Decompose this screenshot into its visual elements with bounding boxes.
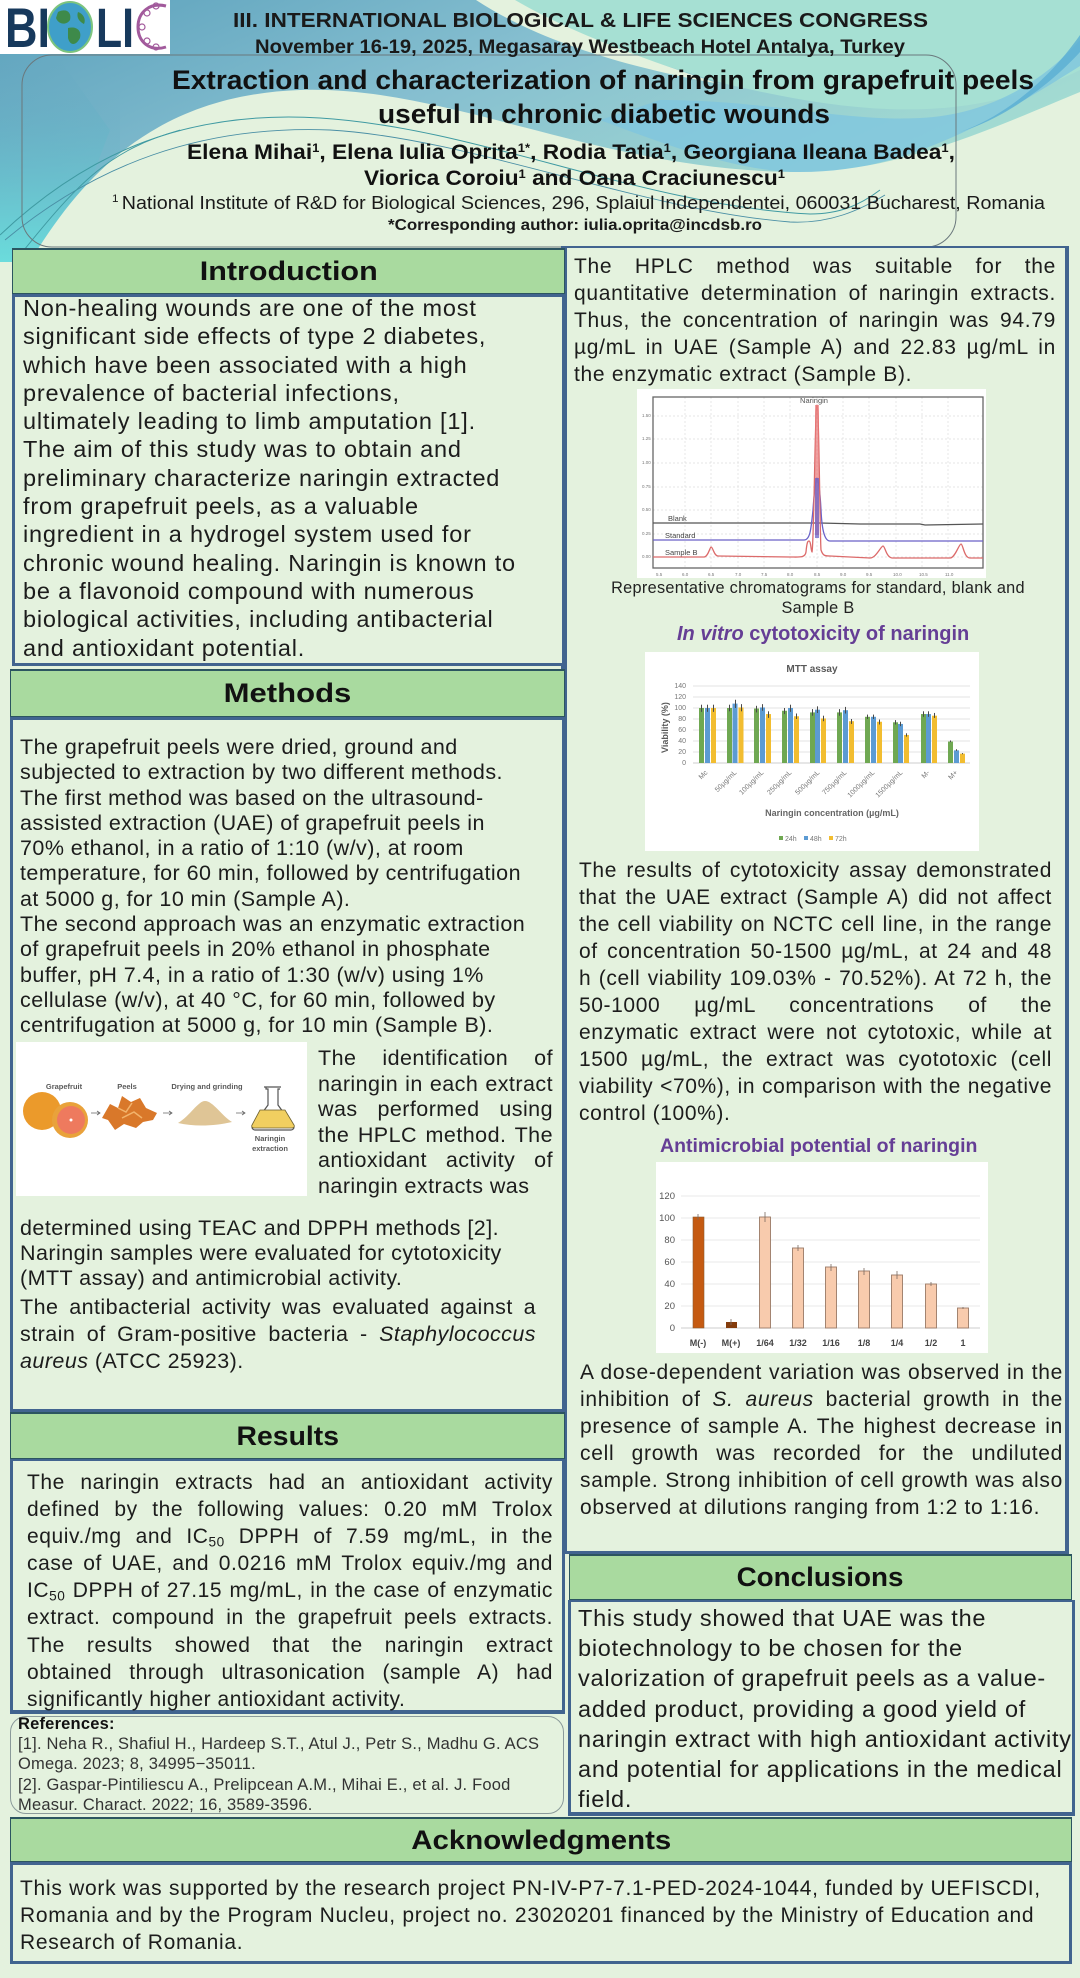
chart: antimicrobial bars: 1/8 xyxy=(858,1338,870,1348)
heading: introduction xyxy=(12,248,565,294)
chart: MTT assay bars: 20 xyxy=(678,749,686,756)
text: HPLC results xyxy=(574,254,1056,386)
chart: MTT assay bars: 100 xyxy=(674,705,686,712)
authors: 1 xyxy=(519,167,526,181)
chart: MTT assay bars xyxy=(645,652,979,851)
heading: results: Results xyxy=(236,1420,339,1450)
chart: antimicrobial bars: 1/4 xyxy=(891,1338,903,1348)
affiliation: 1 xyxy=(112,193,122,205)
chart: HPLC chromatograms: 9.5 xyxy=(866,572,873,577)
heading: antimicrobial potential: Antimicrobial potential of naringin xyxy=(660,1135,977,1157)
chart: HPLC chromatograms: 1.00 xyxy=(642,460,651,465)
text: conclusions: valorization of grapefruit peels as a value- xyxy=(578,1665,1046,1691)
illustration: grapefruit extraction workflow: Drying and grinding xyxy=(171,1082,243,1091)
text: cytotoxicity results: the cell viability on NCTC cell line, in the range xyxy=(579,912,1052,936)
panel: results xyxy=(10,1412,565,1714)
text: HPLC results: µg/mL in UAE (Sample A) and 22.83 µg/mL in xyxy=(574,336,1056,358)
text: methods continuation: Naringin samples were evaluated for cytotoxicity xyxy=(20,1240,502,1264)
text: cytotoxicity results: 50-1000 µg/mL concentrations of the xyxy=(579,994,1052,1016)
text: results: case of UAE, and 0.0216 mM Trolox equiv./mg and xyxy=(27,1552,553,1575)
text: conclusions: and potential for applications in the medical xyxy=(578,1756,1062,1782)
panel: right column results xyxy=(561,246,1069,1554)
chart: antimicrobial bars: 60 xyxy=(664,1257,675,1268)
chart: HPLC chromatograms: Sample B xyxy=(665,548,698,557)
chart: MTT assay bars: Viability (%) xyxy=(660,702,670,753)
text: references: Omega. 2023; 8, 34995−35011. xyxy=(18,1755,256,1773)
authors: 1 xyxy=(312,141,320,155)
chart: HPLC chromatograms: 0.75 xyxy=(642,484,651,489)
chart: HPLC chromatograms: 8.0 xyxy=(787,572,794,577)
panel: references xyxy=(10,1716,564,1814)
text: methods extraction steps: The second approach was an enzymatic extraction xyxy=(20,912,525,936)
chart: HPLC chromatograms: 8.5 xyxy=(814,572,821,577)
authors: Elena Mihai xyxy=(187,141,303,164)
chart: HPLC chromatograms: 10.5 xyxy=(919,572,928,577)
text: identification beside illustration: the HPLC method. The xyxy=(318,1122,553,1146)
text: results: The results showed that the naringin extract xyxy=(27,1634,553,1657)
authors: , Rodia Tatia xyxy=(530,141,664,164)
text: antibacterial activity: The antibacterial activity was evaluated against a xyxy=(20,1295,536,1319)
authors: 1 xyxy=(778,167,785,181)
text: antimicrobial results: A dose-dependent variation was observed in the xyxy=(580,1360,1063,1384)
authors: 1 xyxy=(941,141,949,155)
text: identification beside illustration: antioxidant activity of xyxy=(318,1148,553,1172)
text: introduction: chronic wound healing. Naringin is known to xyxy=(23,550,516,576)
text: conclusions: biotechnology to be chosen for the xyxy=(578,1635,963,1661)
text: cytotoxicity results: h (cell viability 109.03% - 70.52%). At 72 h, the xyxy=(579,966,1052,990)
panel: conclusions xyxy=(568,1554,1075,1816)
text: introduction: significant side effects of type 2 diabetes, xyxy=(23,323,486,349)
chart: MTT assay bars: 140 xyxy=(674,683,686,690)
chart: HPLC chromatograms: Naringin xyxy=(800,396,828,405)
text: introduction: prevalence of bacterial infections, xyxy=(23,380,400,406)
text: introduction: and antioxidant potential. xyxy=(23,635,305,661)
text: acknowledgments: Research of Romania. xyxy=(20,1931,243,1954)
text: methods extraction steps: assisted extraction (UAE) of grapefruit peels in xyxy=(20,811,485,835)
chart: MTT assay bars: 24h xyxy=(785,836,797,843)
text: cytotoxicity results: viability <70%), in comparison with the negative xyxy=(579,1074,1052,1098)
heading: introduction: Introduction xyxy=(200,256,377,286)
text: introduction: The aim of this study was to obtain and xyxy=(23,436,462,462)
chart: MTT assay bars: Naringin concentration (µg/mL) xyxy=(765,808,899,818)
chart: HPLC chromatograms xyxy=(637,389,986,578)
conference date and venue: November 16-19, 2025, Megasaray Westbeach Hotel Antalya, Turkey xyxy=(255,37,905,58)
chart: HPLC chromatograms: 11.0 xyxy=(945,572,954,577)
text: methods extraction steps: centrifugation at 5000 g, for 10 min (Sample B). xyxy=(20,1013,493,1037)
text: methods continuation: determined using TEAC and DPPH methods [2]. xyxy=(20,1216,499,1240)
heading: acknowledgments: Acknowledgments xyxy=(411,1824,671,1854)
text: HPLC results: Thus, the concentration of naringin was 94.79 xyxy=(574,308,1056,332)
text: results: The naringin extracts had an antioxidant activity xyxy=(27,1471,553,1494)
text: identification beside illustration: naringin extracts was xyxy=(318,1174,529,1198)
illustration: grapefruit extraction workflow: Grapefruit xyxy=(46,1082,83,1091)
chart: HPLC chromatograms: 6.5 xyxy=(708,572,715,577)
heading: in vitro cytotoxicity: In vitro cytotoxicity of naringin xyxy=(677,623,969,645)
text: references: References: xyxy=(18,1715,115,1733)
chart: MTT assay bars: 500µg/mL xyxy=(794,769,821,797)
text: cytotoxicity results: enzymatic extract were not cytotoxic, while at xyxy=(579,1020,1052,1044)
title frame rounded outline xyxy=(22,54,956,248)
text: HPLC results: The HPLC method was suitable for the xyxy=(574,254,1056,278)
chart: antimicrobial bars: 1/64 xyxy=(756,1338,774,1348)
text: cytotoxicity results: The results of cytotoxicity assay demonstrated xyxy=(579,858,1052,882)
text: results: significantly higher antioxidant activity. xyxy=(27,1688,405,1711)
chart: MTT assay bars: 1500µg/mL xyxy=(875,769,904,799)
text: identification beside illustration xyxy=(318,1046,553,1198)
chart: antimicrobial bars: 40 xyxy=(664,1279,675,1290)
heading: results xyxy=(10,1412,565,1459)
chart: MTT assay bars: M- xyxy=(921,769,932,780)
text: results: equiv./mg and IC50 DPPH of 7.59 mg/mL, in the xyxy=(27,1525,553,1550)
chart: HPLC chromatograms: 5.5 xyxy=(656,572,663,577)
text: introduction: which have been associated with a high xyxy=(23,352,468,378)
chart: HPLC chromatograms: 0.25 xyxy=(642,531,651,536)
chart: antimicrobial bars: 80 xyxy=(664,1235,675,1246)
box: acknowledgments body xyxy=(10,1862,1072,1964)
chart: antimicrobial bars: 1/2 xyxy=(925,1338,937,1348)
chart: antimicrobial bars: 1 xyxy=(960,1338,966,1348)
text: HPLC results: the enzymatic extract (Sample B). xyxy=(574,362,912,386)
text: methods extraction steps: subjected to extraction by two different methods. xyxy=(20,760,503,784)
text: methods continuation xyxy=(20,1216,502,1290)
text: references: [2]. Gaspar-Pintiliescu A., Prelipcean A.M., Mihai E., et al. J. Food xyxy=(18,1776,511,1794)
authors: , xyxy=(949,141,955,164)
chart: HPLC chromatograms: 9.0 xyxy=(840,572,847,577)
text: antimicrobial results: observed at dilutions ranging from 1:2 to 1:16. xyxy=(580,1496,1040,1518)
chart: MTT assay bars: Mc xyxy=(698,769,710,781)
chart: MTT assay bars: 750µg/mL xyxy=(821,769,848,797)
authors: 1 xyxy=(664,141,671,155)
chart: HPLC chromatograms: 1.50 xyxy=(642,413,651,418)
chart: MTT assay bars: 80 xyxy=(678,716,686,723)
conference and poster title block xyxy=(112,10,1046,234)
chart: MTT assay bars: 0 xyxy=(682,760,686,767)
text: introduction: biological activities, including antibacterial xyxy=(23,606,493,632)
text: methods extraction steps: buffer, pH 7.4, in a ratio of 1:30 (w/v) using 1% xyxy=(20,963,484,987)
caption: chromatograms: Representative chromatograms for standard, blank and xyxy=(611,579,1025,597)
chart: MTT assay bars: 40 xyxy=(678,738,686,745)
text: antimicrobial results xyxy=(580,1360,1063,1518)
chart: MTT assay bars: 120 xyxy=(674,694,686,701)
text: conclusions: added product, providing a good yield of xyxy=(578,1696,1026,1722)
text: antimicrobial results: presence of sample A. The highest decrease in xyxy=(580,1414,1063,1438)
authors: and Oana Craciunescu xyxy=(526,167,778,190)
text: introduction xyxy=(23,295,516,661)
text: methods extraction steps: cellulase (w/v), at 40 °C, for 60 min, followed by xyxy=(20,988,496,1012)
heading: conclusions xyxy=(569,1554,1072,1600)
text: methods extraction steps: temperature, for 60 min, followed by centrifugation xyxy=(20,861,521,885)
chart: MTT assay bars: 250µg/mL xyxy=(766,769,793,797)
authors xyxy=(187,141,955,190)
box: conclusions body xyxy=(568,1600,1075,1816)
text: HPLC results: quantitative determination of naringin extracts. xyxy=(574,282,1056,304)
conference name: III. INTERNATIONAL BIOLOGICAL & LIFE SCIENCES CONGRESS xyxy=(233,10,928,32)
chart: HPLC chromatograms: 0.50 xyxy=(642,507,651,512)
text: introduction: preliminary characterize naringin extracted xyxy=(23,465,500,491)
text: acknowledgments: This work was supported by the research project PN-IV-P7-7.1-PED-2024-1044, funded by UEFISCDI, xyxy=(20,1877,1041,1900)
chart: antimicrobial bars: 20 xyxy=(664,1301,675,1312)
text: methods continuation: (MTT assay) and antimicrobial activity. xyxy=(20,1266,402,1290)
chart: MTT assay bars: 100µg/mL xyxy=(738,769,765,797)
text: results: defined by the following values: 0.20 mM Trolox xyxy=(27,1498,553,1521)
text: identification beside illustration: was performed using xyxy=(318,1097,553,1121)
chart: MTT assay bars: 1000µg/mL xyxy=(847,769,876,799)
text: conclusions: naringin extract with high antioxidant activity xyxy=(578,1726,1072,1752)
chart: MTT assay bars: 50µg/mL xyxy=(714,769,738,794)
background with teal gradient and swooshes xyxy=(0,0,1080,262)
authors: , Georgiana Ileana Badea xyxy=(671,141,942,164)
authors: Viorica Coroiu xyxy=(364,167,507,190)
text: cytotoxicity results: 1500 µg/mL, the extract was cyototoxic (cell xyxy=(579,1048,1052,1070)
text: methods extraction steps: The first method was based on the ultrasound- xyxy=(20,786,484,810)
text: references xyxy=(18,1715,539,1814)
caption: chromatograms xyxy=(611,579,1025,617)
illustration: grapefruit extraction workflow xyxy=(16,1042,307,1196)
text: results xyxy=(27,1471,553,1711)
text: references: Measur. Charact. 2022; 16, 3589-3596. xyxy=(18,1796,313,1814)
box: methods body xyxy=(10,717,565,1412)
illustration: grapefruit extraction workflow: Peels xyxy=(117,1082,137,1091)
panel: acknowledgments xyxy=(10,1817,1072,1964)
heading: acknowledgments xyxy=(10,1817,1072,1862)
poster title xyxy=(172,65,1034,129)
text: cytotoxicity results: that the UAE extract (Sample A) did not affect xyxy=(579,886,1052,908)
caption: chromatograms: Sample B xyxy=(782,599,854,617)
chart: MTT assay bars: 72h xyxy=(835,836,847,843)
chart: HPLC chromatograms: 6.0 xyxy=(682,572,689,577)
text: results: obtained through ultrasonication (sample A) had xyxy=(27,1661,553,1684)
text: antimicrobial results: inhibition of S. aureus bacterial growth in the xyxy=(580,1388,1063,1410)
text: conclusions xyxy=(578,1605,1072,1812)
text: references: [1]. Neha R., Shafiul H., Hardeep S.T., Atul J., Petr S., Madhu G. ACS xyxy=(18,1735,539,1753)
chart: antimicrobial bars: 1/16 xyxy=(822,1338,840,1348)
text: cytotoxicity results: of concentration 50-1500 µg/mL, at 24 and 48 xyxy=(579,940,1052,962)
authors: , Elena Iulia Oprita xyxy=(319,141,518,164)
chart: MTT assay bars: 60 xyxy=(678,727,686,734)
chart: MTT assay bars: MTT assay xyxy=(786,664,838,675)
panel: introduction xyxy=(12,248,565,666)
box: results body xyxy=(10,1459,565,1714)
text: methods extraction steps: The grapefruit peels were dried, ground and xyxy=(20,735,458,759)
text: methods extraction steps: of grapefruit peels in 20% ethanol in phosphate xyxy=(20,937,491,961)
text: identification beside illustration: The identification of xyxy=(318,1046,553,1070)
text: methods extraction steps: at 5000 g, for 10 min (Sample A). xyxy=(20,887,350,911)
chart: HPLC chromatograms: 10.0 xyxy=(893,572,902,577)
chart: HPLC chromatograms: Blank xyxy=(668,514,687,523)
text: introduction: from grapefruit peels, as a valuable xyxy=(23,493,419,519)
text: conclusions: This study showed that UAE was the xyxy=(578,1605,986,1631)
text: acknowledgments xyxy=(20,1877,1041,1954)
text: results: IC50 DPPH of 27.15 mg/mL, in the case of enzymatic xyxy=(27,1579,553,1604)
text: antibacterial activity: strain of Gram-positive bacteria - Staphylococcus xyxy=(20,1322,536,1346)
text: results: extract. compound in the grapefruit peels extracts. xyxy=(27,1606,553,1629)
chart: HPLC chromatograms: 7.5 xyxy=(761,572,768,577)
chart: MTT assay bars: 48h xyxy=(810,836,822,843)
text: identification beside illustration: naringin in each extract xyxy=(318,1072,553,1096)
chart: antimicrobial bars: 1/32 xyxy=(789,1338,807,1348)
text: antimicrobial results: cell growth was recorded for the undiluted xyxy=(580,1442,1063,1464)
box: introduction body xyxy=(12,294,565,666)
chart: antimicrobial bars: M(-) xyxy=(690,1338,706,1348)
poster title: useful in chronic diabetic wounds xyxy=(378,99,830,129)
panel: methods xyxy=(10,669,565,1412)
chart: MTT assay bars: M+ xyxy=(947,769,959,781)
affiliation: National Institute of R&D for Biological Sciences, 296, Splaiul Independentei, 060031 Bucharest, Romania xyxy=(122,192,1046,213)
heading: methods: Methods xyxy=(224,678,351,708)
text: introduction: ingredient in a hydrogel system used for xyxy=(23,521,472,547)
chart: antimicrobial bars: 120 xyxy=(659,1191,675,1202)
chart: HPLC chromatograms: 1.25 xyxy=(642,436,651,441)
heading: methods xyxy=(10,669,565,717)
text: antimicrobial results: sample. Strong inhibition of cell growth was also xyxy=(580,1468,1063,1492)
text: methods extraction steps: 70% ethanol, in a ratio of 1:10 (w/v), at room xyxy=(20,836,464,860)
heading: conclusions: Conclusions xyxy=(737,1562,904,1592)
chart: HPLC chromatograms: Standard xyxy=(665,531,695,540)
text: acknowledgments: Romania and by the Program Nucleu, project no. 23020201 financed by the Ministry of Education and xyxy=(20,1904,1034,1927)
text: antibacterial activity xyxy=(20,1295,536,1373)
illustration: grapefruit extraction workflow: Naringin xyxy=(255,1134,286,1143)
text: introduction: ultimately leading to limb amputation [1]. xyxy=(23,408,476,434)
chart: HPLC chromatograms: 7.0 xyxy=(735,572,742,577)
illustration: grapefruit extraction workflow: extraction xyxy=(252,1144,288,1153)
chart: antimicrobial bars: M(+) xyxy=(722,1338,740,1348)
authors: 1* xyxy=(518,141,530,155)
text: antibacterial activity: aureus (ATCC 25923). xyxy=(20,1349,244,1373)
corresponding author: *Corresponding author: iulia.oprita@incdsb.ro xyxy=(388,217,762,234)
logo: BIOLIC with globe xyxy=(0,0,170,54)
chart: antimicrobial bars: 0 xyxy=(670,1323,675,1334)
chart: HPLC chromatograms: 0.00 xyxy=(642,554,651,559)
text: methods extraction steps xyxy=(20,735,525,1037)
text: introduction: Non-healing wounds are one of the most xyxy=(23,295,477,321)
chart: antimicrobial bars: 100 xyxy=(659,1213,675,1224)
poster title: Extraction and characterization of naringin from grapefruit peels xyxy=(172,65,1034,95)
text: conclusions: field. xyxy=(578,1786,632,1812)
text: cytotoxicity results xyxy=(579,858,1052,1124)
text: cytotoxicity results: control (100%). xyxy=(579,1102,730,1124)
chart: antimicrobial bars xyxy=(656,1162,988,1353)
text: introduction: be a flavonoid compound with numerous xyxy=(23,578,475,604)
